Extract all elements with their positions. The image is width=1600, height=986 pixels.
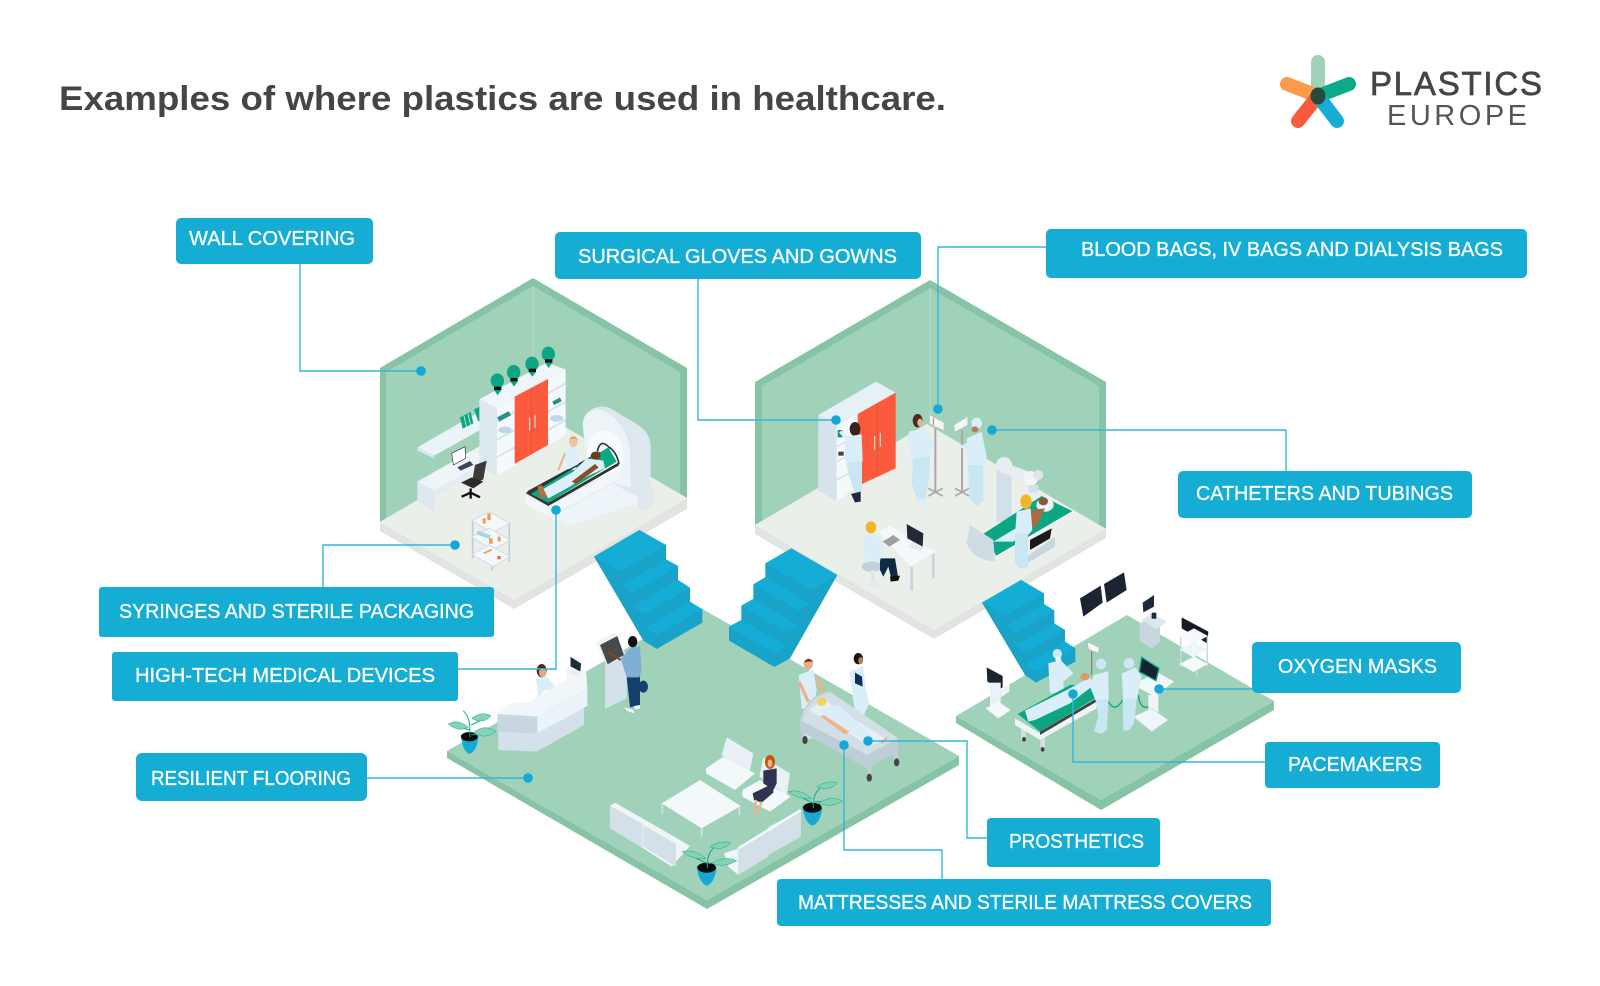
nurse at MRI — [543, 436, 581, 483]
room 2: walls and floor — [755, 280, 1106, 639]
connector: surgical gloves — [698, 279, 841, 425]
label: resilient flooring — [136, 753, 367, 801]
cabinet — [818, 382, 896, 502]
label: catheters and tubings: CATHETERS AND TUBINGS — [1196, 483, 1453, 505]
connector: catheters — [987, 425, 1286, 471]
connector: prosthetics — [863, 736, 987, 838]
connector: syringes — [323, 540, 460, 587]
armchair left — [706, 737, 755, 790]
operating room floor — [956, 615, 1274, 810]
label: prosthetics — [987, 818, 1160, 867]
stair 3 body — [982, 580, 1075, 683]
connector: pacemakers — [1068, 689, 1265, 762]
label: surgical gloves and gowns — [555, 232, 921, 279]
logo: Plastics Europe — [1287, 62, 1542, 132]
label: pacemakers — [1265, 742, 1440, 788]
man at kiosk — [608, 636, 648, 713]
label: pacemakers: PACEMAKERS — [1288, 754, 1422, 776]
office chair — [461, 461, 487, 499]
reception desk — [497, 668, 587, 752]
orange cabinet doors — [515, 379, 548, 464]
binders — [460, 405, 486, 429]
kiosk — [596, 633, 627, 709]
desk with man — [862, 521, 935, 591]
IV stands — [928, 415, 969, 496]
connector: flooring — [367, 773, 533, 783]
connector: mattresses — [839, 740, 942, 879]
woman with IV stand — [909, 414, 934, 504]
surgeon two — [1089, 659, 1109, 734]
label: blood bags: BLOOD BAGS, IV BAGS AND DIALYSIS BAGS — [1081, 239, 1503, 261]
IV bag — [1087, 642, 1099, 675]
connector: high-tech devices — [458, 505, 561, 669]
label: mattresses: MATTRESSES AND STERILE MATTRESS COVERS — [798, 892, 1252, 914]
scene: waiting area and transfer bed — [610, 653, 899, 886]
label: mattresses — [777, 879, 1271, 926]
plant by reception — [448, 711, 496, 754]
logo wordmark bottom: EUROPE — [1387, 100, 1527, 132]
ultrasound cart — [1133, 657, 1174, 732]
logo wordmark top: PLASTICS — [1370, 65, 1542, 102]
connector: blood bags — [933, 247, 1046, 414]
scene: reception area — [448, 633, 648, 754]
left monitor cart — [986, 667, 1011, 718]
stair 2 — [729, 548, 837, 667]
equipment rack — [1179, 617, 1208, 677]
scene: room 2 equipment — [818, 382, 1073, 591]
orange door — [858, 393, 896, 486]
plant front — [682, 842, 737, 886]
MRI scanner — [525, 406, 654, 526]
label: catheters and tubings — [1178, 471, 1472, 518]
logo icon: star — [1287, 62, 1349, 121]
label: high-tech medical devices — [112, 652, 458, 701]
nurse at cabinet — [840, 422, 863, 502]
desk — [417, 446, 497, 512]
green plants on shelf — [491, 347, 555, 395]
coffee table — [662, 780, 741, 837]
breathing tubes — [1108, 695, 1149, 707]
transfer bed — [800, 692, 899, 782]
seated woman — [753, 755, 777, 815]
stairs: left and centre — [594, 530, 837, 667]
nurse with mask — [960, 418, 987, 506]
surgeon three — [1122, 658, 1142, 731]
label: syringes: SYRINGES AND STERILE PACKAGING — [119, 601, 474, 623]
surgeon one — [1048, 649, 1073, 693]
label: resilient flooring: RESILIENT FLOORING — [151, 768, 351, 790]
stair 3 treads — [982, 580, 1075, 672]
operating table — [1015, 673, 1097, 752]
armchair with woman — [742, 757, 791, 812]
label: wall covering — [176, 218, 373, 264]
left sofa — [610, 803, 690, 867]
label: syringes — [99, 587, 494, 637]
title: Examples of where plastics are used in healthcare. — [59, 80, 946, 118]
trolley — [472, 512, 510, 571]
shelving unit — [479, 363, 566, 476]
scene: operating room — [982, 572, 1208, 752]
right sofa — [724, 810, 801, 875]
connector: wall covering — [300, 264, 426, 376]
lobby floor — [447, 607, 959, 909]
plant right — [788, 782, 842, 826]
reception monitor — [569, 656, 582, 676]
laptop — [452, 447, 473, 471]
anesthesia unit — [1139, 595, 1167, 648]
room 1: walls and floor — [380, 278, 687, 609]
doctor — [799, 658, 824, 740]
wall shelf — [417, 412, 495, 459]
wall monitors — [1080, 572, 1127, 617]
label: oxygen masks — [1252, 642, 1461, 693]
label: oxygen masks: OXYGEN MASKS — [1278, 656, 1437, 678]
label: prosthetics: PROSTHETICS — [1009, 831, 1144, 853]
X-ray arm — [996, 457, 1043, 522]
label: wall covering: WALL COVERING — [189, 228, 355, 250]
stair 1 — [594, 530, 702, 649]
blonde nurse at table — [1015, 494, 1032, 569]
scene: room 1 equipment — [417, 347, 654, 571]
label: surgical gloves and gowns: SURGICAL GLOVES AND GOWNS — [578, 246, 897, 268]
connector: oxygen masks — [1154, 684, 1252, 694]
patient table — [967, 496, 1073, 563]
label: blood bags — [1046, 229, 1527, 278]
label: high-tech medical devices: HIGH-TECH MEDICAL DEVICES — [135, 665, 435, 687]
receptionist — [536, 664, 558, 697]
nurse with clipboard — [849, 653, 869, 720]
